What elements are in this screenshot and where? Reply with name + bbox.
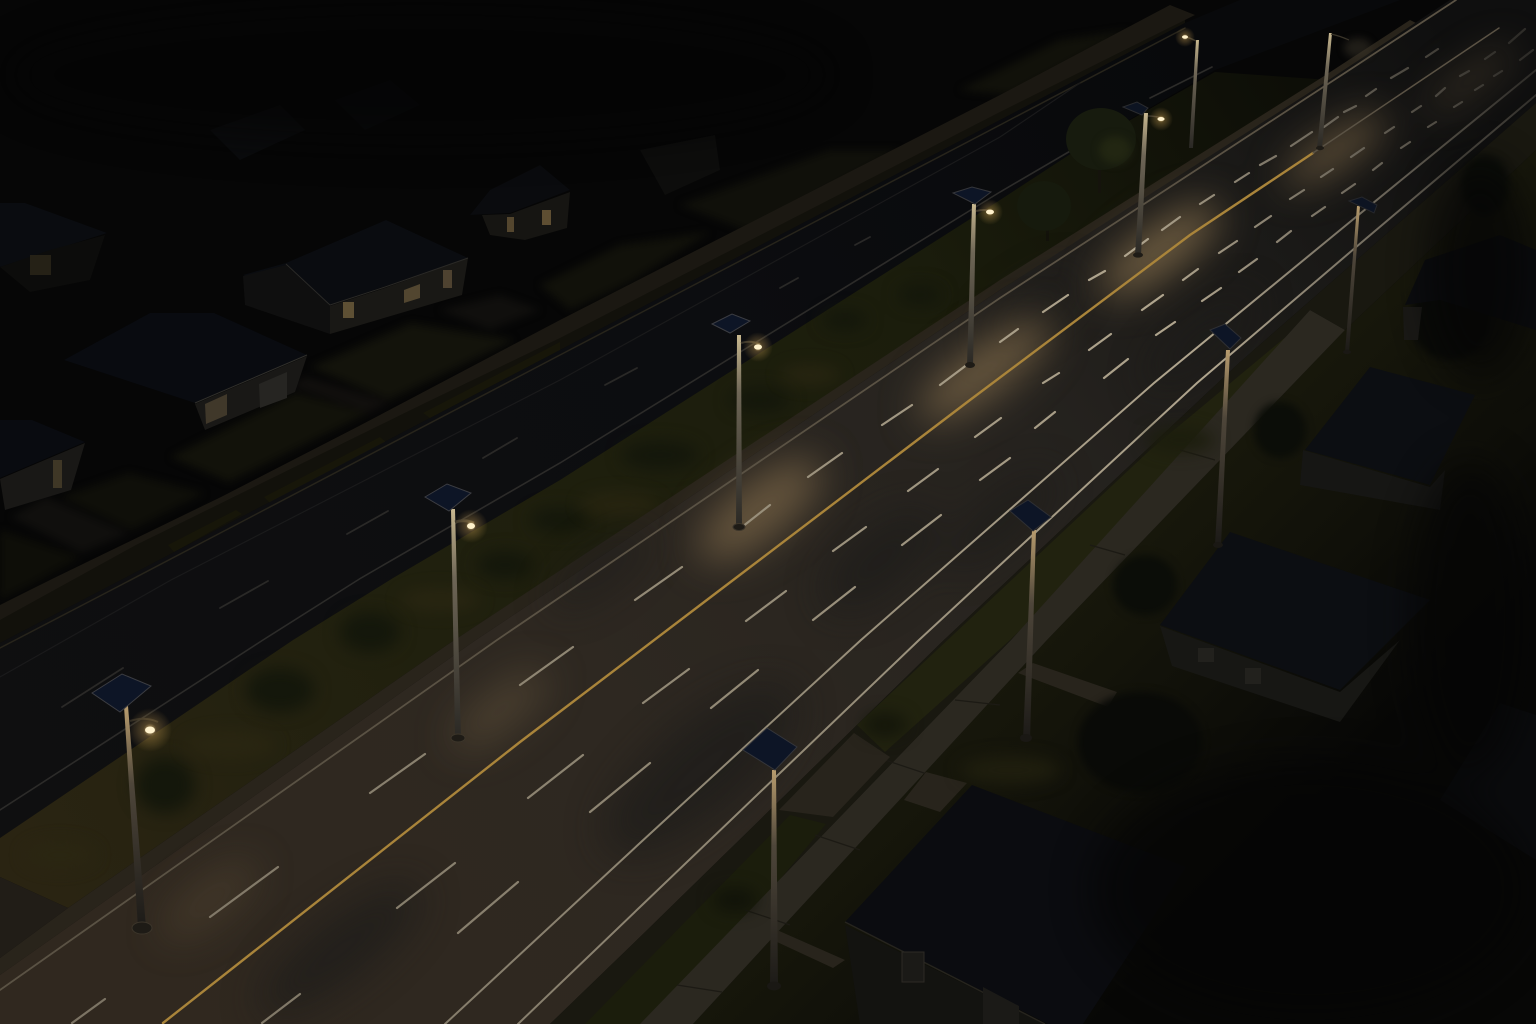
upper road	[0, 0, 1400, 838]
house: large roof with garage	[64, 313, 307, 430]
house: upper house with two windows	[470, 165, 570, 240]
solar street light 6	[1175, 27, 1199, 148]
solar street light 10	[1010, 500, 1051, 742]
house: upper-right house	[1300, 367, 1475, 510]
grass median	[0, 72, 1330, 908]
upper road edge and lane lines	[0, 28, 1185, 648]
planting strips beside upper road	[168, 342, 560, 552]
median shrubs and dark patches	[24, 285, 942, 869]
sidewalk along upper road	[0, 5, 1195, 620]
verge grass strips	[585, 325, 1322, 1024]
tree: round tree in median	[1066, 108, 1136, 193]
solar street light 2	[425, 484, 488, 742]
solar street light 7	[1316, 33, 1372, 150]
house: top-left dim house	[0, 203, 107, 292]
solar street light 4	[953, 187, 1003, 368]
verge between road edge and sidewalk	[550, 103, 1536, 1024]
sidewalk along main road	[640, 310, 1345, 1024]
neighbourhood lawns and driveways, upper left	[0, 30, 1130, 600]
solar street light 11	[743, 728, 797, 990]
solar street light 8	[1343, 197, 1377, 354]
right-side lawn beyond the sidewalk	[693, 150, 1536, 1024]
house: far-right houses	[1403, 235, 1536, 860]
tree: small tree in median	[1017, 181, 1071, 241]
concrete plaza and driveway paving	[777, 663, 1117, 968]
house: row house with lit windows	[243, 220, 468, 334]
house: top-centre dim houses	[210, 80, 720, 195]
wedge of pavement at median tip	[0, 877, 68, 958]
pools of light on the road	[150, 38, 1522, 953]
solar street light 5	[1123, 102, 1173, 258]
house: large house at bottom centre	[845, 785, 1186, 1024]
sidewalk expansion joints	[677, 450, 1215, 992]
upper road markings	[0, 28, 1212, 810]
shadow patches across road	[243, 260, 1266, 1024]
house: left-edge garage house	[0, 420, 85, 510]
solar street light 3	[712, 314, 773, 530]
trees on right side	[1078, 155, 1509, 792]
ground strip between sidewalk and upper road	[0, 14, 1185, 643]
solar street light 1	[92, 674, 172, 934]
lawn blotches, lower right	[713, 428, 1214, 912]
house: mid-right house	[1160, 532, 1430, 722]
solar street light 9	[1210, 324, 1241, 548]
